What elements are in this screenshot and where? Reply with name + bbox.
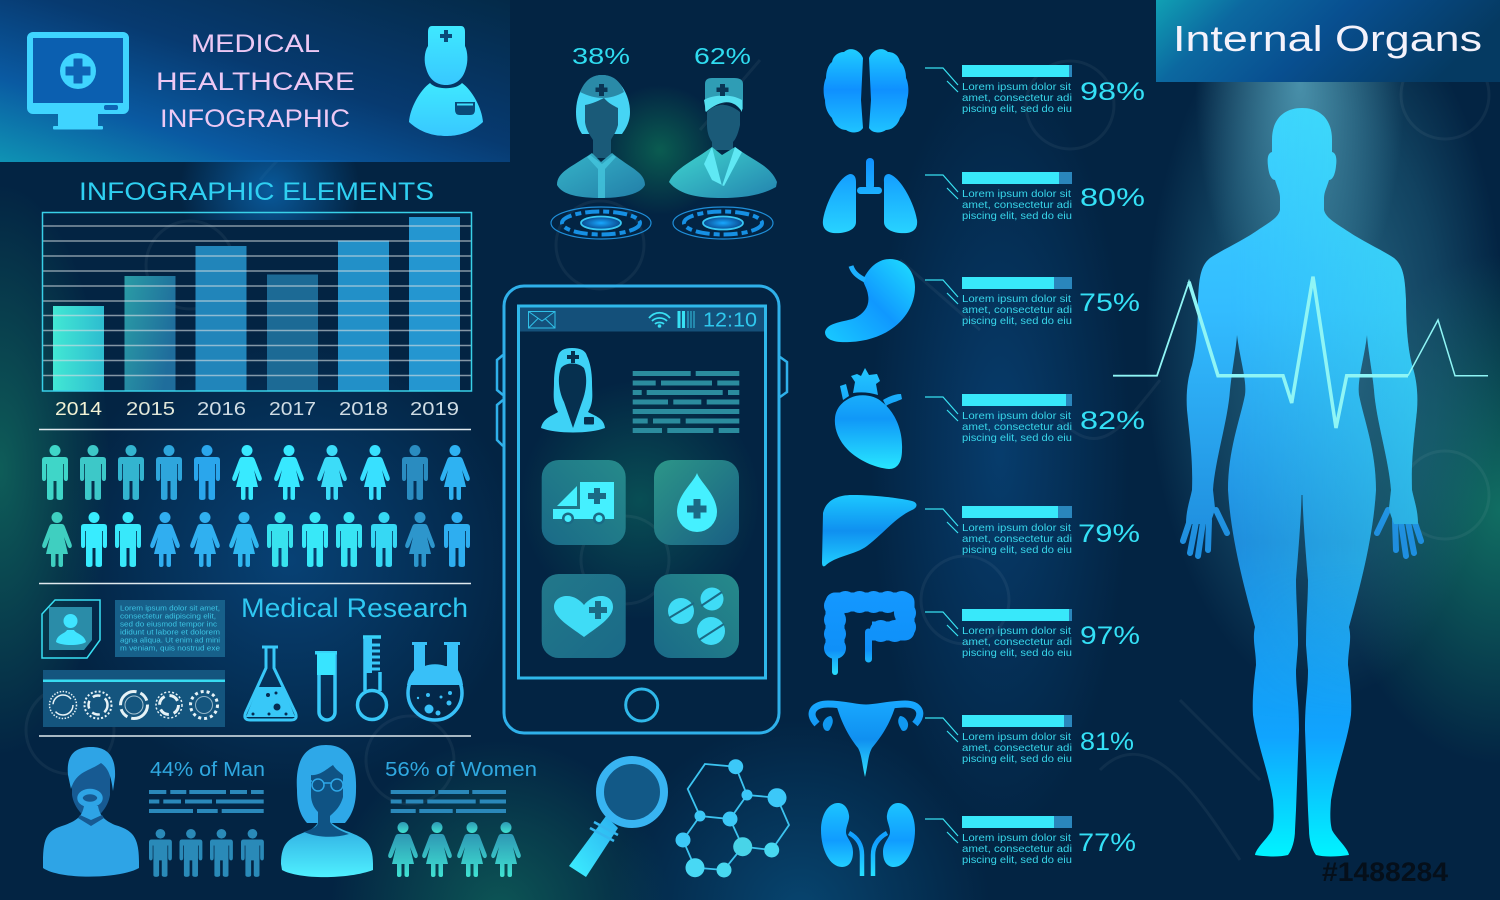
bar chart year labels [55,399,459,419]
stat: stomach 75%: 75% [1079,289,1140,317]
icon: kidneys [821,803,915,876]
organ row: stomach [825,259,1140,342]
stat: heart 82%: 82% [1080,407,1145,435]
stat: brain 98%: 98% [1080,78,1145,106]
stat: liver 79%: Lorem ipsum dolor sit [962,522,1071,534]
icon: man bust [43,747,139,877]
organ row: kidneys [821,803,1136,876]
stat: lungs 80%: 80% [1080,184,1145,212]
phone mockup [497,286,787,733]
stat: intestine 97%: amet, consectetur adi [962,636,1072,648]
pictograms: four men [149,829,264,877]
icon: heart [835,368,902,469]
text block: research notes: Lorem ipsum dolor sit amet, [120,604,220,612]
organ row: heart [835,368,1145,469]
icon: nurse [409,26,483,136]
bar chart [42,212,472,391]
panel: progress dials [43,670,225,727]
panel: internal organs title [1156,0,1500,82]
status bar [520,308,764,332]
stat: intestine 97% [925,609,1140,659]
stat: intestine 97%: piscing elit, sed do eiu [962,647,1072,659]
stock image id: #1488284 [1322,857,1448,887]
label: 38%: 38% [572,43,630,69]
icon: phone nurse [541,348,605,432]
stat: kidneys 77%: amet, consectetur adi [962,843,1072,855]
stat: stomach 75% [925,277,1140,327]
figure: female nurse [557,75,645,198]
text block: research notes: consectetur adipiscing elit, [120,612,216,620]
organ row: intestine [835,602,1140,672]
app tile: pills [654,574,739,658]
stat: heart 82%: amet, consectetur adi [962,421,1072,433]
stat: lungs 80%: piscing elit, sed do eiu [962,210,1072,222]
label: 56% of women: 56% of Women [385,759,537,781]
stat: uterus 81%: 81% [1080,728,1134,756]
icon: profile badge [42,600,100,658]
stat: heart 82% [925,394,1145,444]
icon: uterus [812,704,920,777]
stat: stomach 75%: piscing elit, sed do eiu [962,315,1072,327]
icon: stomach [825,259,915,342]
icon: magnifying glass [569,760,664,877]
stat: liver 79%: piscing elit, sed do eiu [962,544,1072,556]
icon: woman bust [281,745,373,877]
stat: brain 98%: Lorem ipsum dolor sit [962,81,1071,93]
stat: brain 98%: amet, consectetur adi [962,92,1072,104]
icon: molecule [676,759,789,878]
stat: kidneys 77%: Lorem ipsum dolor sit [962,832,1071,844]
app tile: blood drop [654,460,739,545]
bar chart year labels: 2016 [197,399,246,419]
stat: stomach 75%: Lorem ipsum dolor sit [962,293,1071,305]
heading: internal organs: Internal Organs [1173,18,1482,59]
heading: medical healthcare infographic: INFOGRAPHIC [160,105,350,133]
organ row: brain [824,49,1145,132]
stat: brain 98%: piscing elit, sed do eiu [962,103,1072,115]
panel: woman statistic [281,745,537,877]
text lines: man [149,792,264,811]
stat: brain 98% [925,65,1145,115]
text lines: women [391,792,506,811]
stat: uterus 81%: amet, consectetur adi [962,742,1072,754]
bar chart year labels: 2014 [55,399,102,419]
organ row: uterus [812,704,1134,777]
bar chart section [42,160,472,419]
heartbeat line [1113,277,1488,428]
stat: heart 82%: Lorem ipsum dolor sit [962,410,1071,422]
stat: liver 79% [925,506,1140,556]
heading: medical healthcare infographic: HEALTHCARE [156,68,355,96]
panel: man statistic [43,747,265,877]
text block: research notes: sed do eiusmod tempor inc [120,620,217,628]
stat: kidneys 77%: 77% [1078,829,1136,857]
icon: conical flask [245,647,296,720]
text block: research notes: agna aliqua. Ut enim ad mini [120,636,220,644]
icon: thermometer flask [358,637,386,720]
app tile: ambulance [542,460,626,545]
icon: lungs [823,158,917,233]
text block: research notes: ididunt ut labore et dolorem [120,628,220,636]
stat: intestine 97%: 97% [1080,622,1140,650]
stat: liver 79%: amet, consectetur adi [962,533,1072,545]
icon: intestine [835,602,905,672]
bar chart year labels: 2015 [126,399,175,419]
bar chart year labels: 2019 [410,399,459,419]
label: 44% of man: 44% of Man [150,759,265,781]
stat: uterus 81%: Lorem ipsum dolor sit [962,731,1071,743]
stat: lungs 80% [925,172,1145,222]
panel: header banner [0,0,510,162]
icon: holographic disc left [551,207,651,239]
label: 62%: 62% [694,43,751,69]
heading: medical research: Medical Research [241,593,468,623]
text lines: phone [633,374,739,430]
stat: lungs 80%: amet, consectetur adi [962,199,1072,211]
stat: kidneys 77%: piscing elit, sed do eiu [962,854,1072,866]
stat: intestine 97%: Lorem ipsum dolor sit [962,625,1071,637]
organ row: liver [822,495,1140,566]
status bar: 12:10 [703,310,757,332]
home button [626,689,658,721]
text block: research notes [115,600,225,657]
pictograms: four women [388,822,521,877]
nurse figures and percentages [551,43,777,239]
icon: liver [822,495,917,566]
panel: medical research [42,593,468,727]
stat: kidneys 77% [925,816,1136,866]
stat: uterus 81% [925,715,1134,765]
stat: stomach 75%: amet, consectetur adi [962,304,1072,316]
heading: medical healthcare infographic: MEDICAL [191,30,320,58]
stat: lungs 80%: Lorem ipsum dolor sit [962,188,1071,200]
pictogram rows: men and women [42,445,470,567]
stat: liver 79%: 79% [1078,520,1140,548]
icon: holographic disc right [673,207,773,239]
human body silhouette [1183,108,1421,856]
bar chart year labels: 2017 [269,399,316,419]
stat: heart 82%: piscing elit, sed do eiu [962,432,1072,444]
icon: monitor with medical cross [30,35,126,130]
icon: brain [824,49,908,132]
heading: medical healthcare infographic [156,30,355,133]
text block: research notes: m veniam, quis nostrud exe [120,644,220,652]
phone side buttons [497,355,787,446]
bar chart year labels: 2018 [339,399,388,419]
icon: test tube [315,651,337,720]
app tile: heart [542,574,626,658]
heading: infographic elements: INFOGRAPHIC ELEMENTS [79,178,434,206]
stat: uterus 81%: piscing elit, sed do eiu [962,753,1072,765]
icon: round-bottom flask [407,644,463,720]
figure: male doctor [669,78,777,198]
organ row: lungs [823,158,1145,233]
